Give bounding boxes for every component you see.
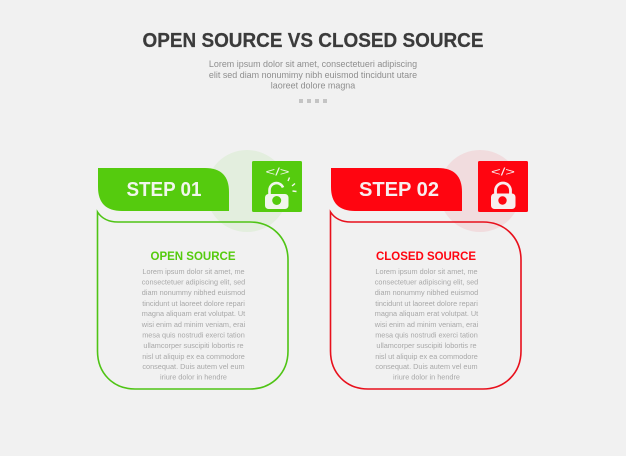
open source body text: iriure dolor in hendre — [160, 372, 227, 382]
open source body text: consequat. Duis autem vel eum — [142, 362, 245, 371]
open source heading: OPEN SOURCE — [150, 249, 236, 263]
open source body text — [141, 267, 246, 382]
step 02 tab: STEP 02 — [359, 179, 439, 201]
closed source body text: iriure dolor in hendre — [393, 372, 460, 382]
closed source body text: consectetuer adipiscing elit, sed — [375, 278, 478, 286]
step 01 tab: STEP 01 — [126, 179, 202, 201]
icon: closed padlock with code: </> — [491, 166, 515, 178]
closed source body text: tincidunt ut laoreet dolore repari — [375, 299, 478, 308]
open source body text: tincidunt ut laoreet dolore repari — [142, 299, 245, 308]
closed source body text: consequat. Duis autem vel eum — [375, 362, 478, 371]
open source body text: nisl ut aliquip ex ea commodore — [142, 352, 245, 361]
subtitle text: Lorem ipsum dolor sit amet, consectetueri adipiscing — [209, 59, 417, 69]
subtitle text — [209, 59, 417, 90]
step 01 tab — [98, 168, 229, 211]
open source body text: wisi enim ad minim veniam, erai — [141, 320, 246, 329]
closed source body text: wisi enim ad minim veniam, erai — [374, 320, 479, 329]
background circle green — [206, 150, 288, 232]
closed source body text: mesa quis nostrudi exerci tation — [375, 330, 478, 340]
panel: open source — [98, 150, 302, 389]
closed source body text — [374, 267, 479, 382]
subtitle text: elit sed diam nonumimy nibh euismod tincidunt utare — [209, 70, 417, 80]
closed source heading: CLOSED SOURCE — [376, 249, 476, 263]
title: OPEN SOURCE VS CLOSED SOURCE — [142, 29, 484, 52]
icon: open padlock with code — [252, 161, 302, 212]
background circle red — [439, 150, 521, 232]
open source body text: diam nonummy nibhed euismod — [142, 288, 245, 297]
subtitle text: laoreet dolore magna — [271, 80, 355, 90]
closed source body text: Lorem ipsum dolor sit amet, me — [375, 267, 478, 276]
closed source body text: magna aliquam erat volutpat. Ut — [375, 309, 478, 318]
step 02 tab — [331, 168, 462, 211]
open source body text: consectetuer adipiscing elit, sed — [142, 278, 245, 286]
open source body text: magna aliquam erat volutpat. Ut — [142, 309, 245, 318]
open source body text: mesa quis nostrudi exerci tation — [142, 330, 245, 340]
open source card outline — [98, 212, 288, 389]
closed source body text: diam nonummy nibhed euismod — [375, 288, 478, 297]
panel: closed source — [330, 150, 528, 389]
open source body text: Lorem ipsum dolor sit amet, me — [142, 267, 245, 276]
closed source card outline — [330, 212, 521, 389]
icon: closed padlock with code — [478, 161, 528, 212]
pagination dots — [299, 99, 327, 103]
closed source body text: ullamcorper suscipiti lobortis re — [376, 341, 477, 350]
icon: open padlock with code: </> — [266, 166, 290, 178]
open source body text: ullamcorper suscipiti lobortis re — [143, 341, 244, 350]
closed source body text: nisl ut aliquip ex ea commodore — [375, 352, 478, 361]
